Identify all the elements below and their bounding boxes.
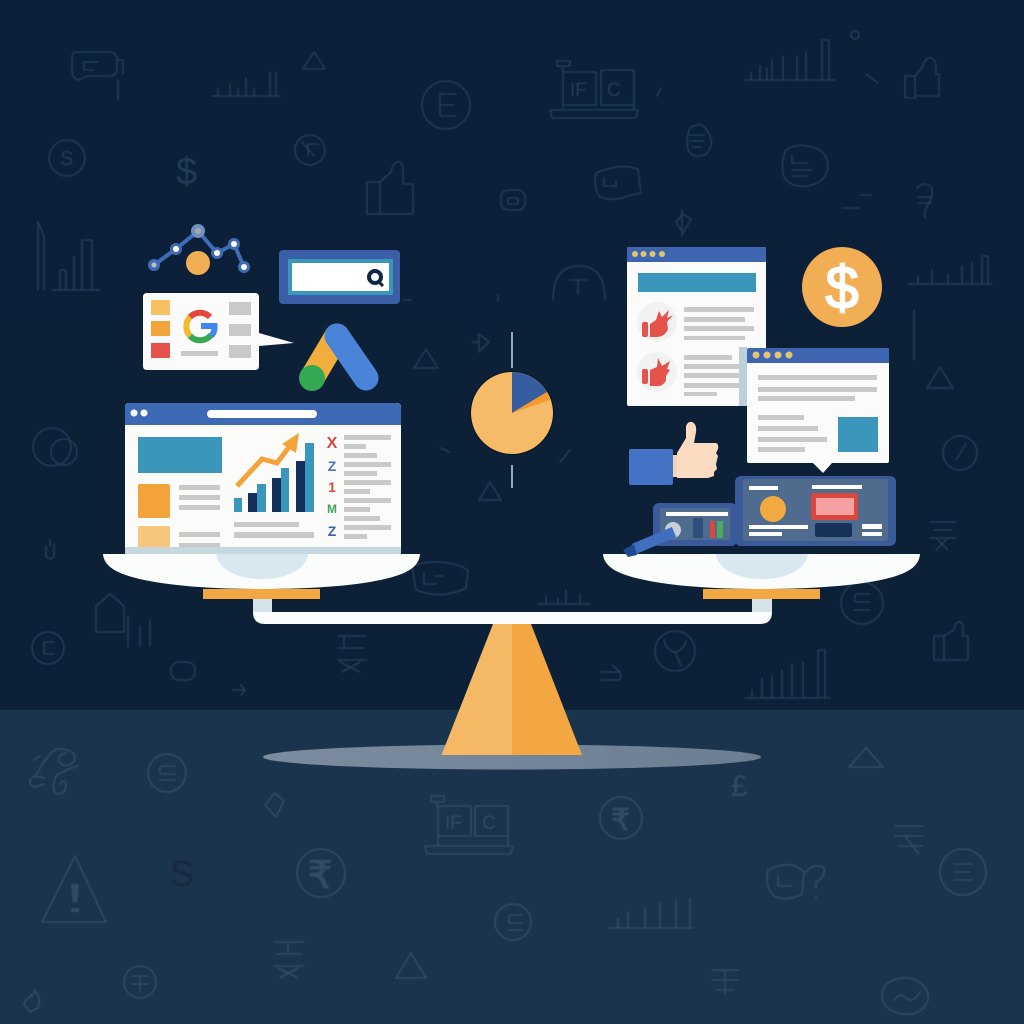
right scale pan bbox=[603, 554, 920, 599]
right stem bbox=[752, 599, 772, 612]
icon: search box bbox=[279, 250, 400, 304]
background floor bbox=[0, 710, 1024, 1024]
icon: plug tool bbox=[623, 532, 674, 557]
large dashboard panel bbox=[735, 476, 896, 546]
icon: thumbs up hand bbox=[629, 422, 718, 485]
background icons: floor bbox=[24, 748, 986, 1014]
right column list: X bbox=[327, 435, 338, 452]
left stem bbox=[253, 599, 272, 612]
review two bbox=[637, 352, 747, 396]
browser window with reviews bbox=[627, 247, 766, 406]
laptop hinge band bbox=[125, 547, 401, 554]
icon: dollar coin: $ bbox=[825, 254, 859, 321]
google callout card bbox=[143, 293, 294, 370]
background icons: wall: $ bbox=[176, 151, 197, 193]
ground shadow bbox=[263, 744, 761, 770]
window header bbox=[627, 247, 766, 262]
bubble header bbox=[747, 348, 889, 363]
laptop on left pan bbox=[125, 403, 401, 554]
background icons: floor: C bbox=[482, 813, 496, 834]
small control panel bbox=[623, 503, 737, 557]
right column list bbox=[327, 435, 391, 539]
left scale pan bbox=[103, 554, 420, 599]
background icons: floor: ₹ bbox=[308, 855, 332, 897]
laptop screen bbox=[125, 403, 401, 554]
icon: dollar coin bbox=[802, 247, 882, 327]
scale fulcrum bbox=[442, 624, 582, 755]
background icons: wall: S bbox=[60, 148, 73, 170]
background icons: floor: £ bbox=[731, 770, 748, 803]
center pie chart bbox=[470, 332, 554, 488]
background icons: wall bbox=[32, 31, 992, 698]
background icons: wall: C bbox=[607, 80, 621, 101]
bar chart with rising arrow bbox=[234, 433, 314, 538]
right column list: M bbox=[327, 502, 337, 516]
browser window speech bubble bbox=[747, 348, 889, 473]
background wall bbox=[0, 0, 1024, 710]
icon: google ads logo bbox=[299, 336, 366, 391]
icon: google G bbox=[186, 313, 215, 340]
right column list: Z bbox=[328, 458, 337, 474]
right column list: Z bbox=[328, 523, 337, 539]
laptop title bar bbox=[125, 403, 401, 425]
background icons: floor: IF bbox=[445, 813, 462, 834]
review one bbox=[637, 302, 754, 342]
left column content bbox=[138, 437, 222, 554]
icon: trend line graph bbox=[148, 224, 250, 275]
right column list: 1 bbox=[328, 479, 336, 495]
scale beam bbox=[253, 600, 772, 624]
background icons: wall: IF bbox=[570, 80, 587, 101]
background icons: floor: S bbox=[170, 853, 194, 894]
background icons: floor: ₹ bbox=[611, 804, 630, 837]
